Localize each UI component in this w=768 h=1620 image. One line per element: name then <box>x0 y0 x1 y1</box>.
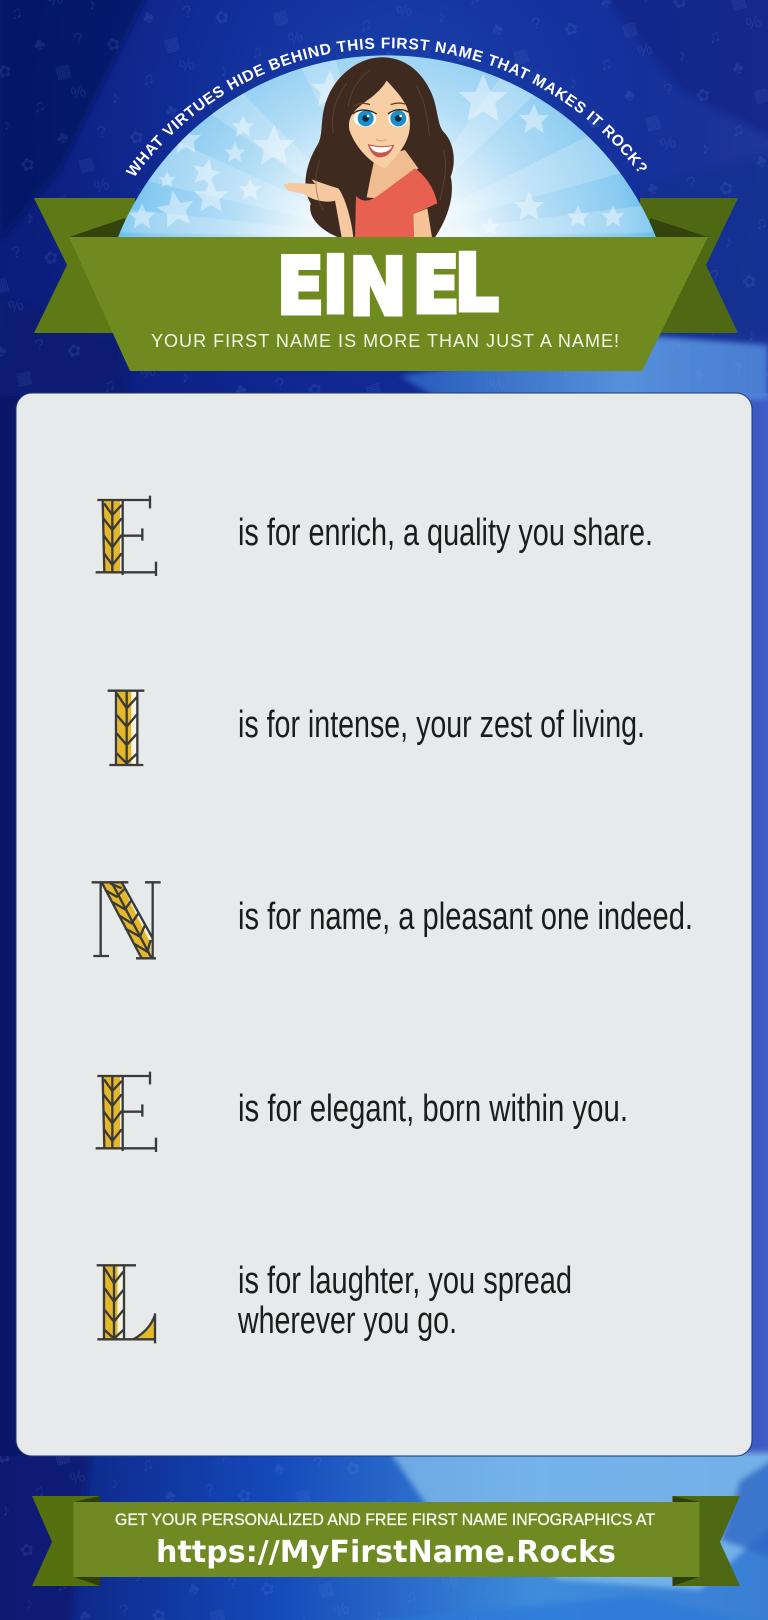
hair <box>305 57 454 237</box>
footer line: GET YOUR PERSONALIZED AND FREE FIRST NAME INFOGRAPHICS AT <box>115 1511 655 1529</box>
footer left tail <box>32 1496 100 1586</box>
footer folds <box>74 1496 699 1586</box>
text L: is for laughter, you spread <box>238 1260 572 1302</box>
main panel <box>16 393 752 1456</box>
letter N <box>92 882 161 958</box>
curved banner arch with starburst <box>118 55 656 237</box>
ribbon fold right <box>650 218 708 237</box>
neck <box>367 150 418 198</box>
letter I <box>108 691 144 765</box>
row 5: L <box>97 1260 572 1343</box>
nose <box>376 139 387 141</box>
row 3: N <box>92 882 693 958</box>
face <box>349 81 410 168</box>
ribbon fold left <box>69 218 125 237</box>
name: EINEL <box>277 239 498 333</box>
left ribbon tail <box>34 198 135 333</box>
right arm <box>413 208 432 237</box>
footer ribbon <box>32 1496 740 1586</box>
footer right tail <box>672 1496 740 1586</box>
mouth <box>368 144 394 157</box>
letter L <box>97 1265 155 1343</box>
row 1: E <box>96 496 653 576</box>
letter E <box>96 1072 156 1152</box>
shirt <box>355 168 437 237</box>
text I: is for intense, your zest of living. <box>238 704 645 746</box>
hair highlights <box>316 70 445 210</box>
letter E <box>96 496 156 576</box>
footer main ribbon <box>74 1502 700 1577</box>
footer url: https://MyFirstName.Rocks <box>156 1535 616 1570</box>
main ribbon <box>69 237 708 371</box>
eyes <box>353 103 409 127</box>
character: woman presenting <box>283 57 454 237</box>
text L: wherever you go. <box>237 1300 457 1342</box>
row 2: I <box>108 691 645 765</box>
row 4: E <box>96 1072 628 1152</box>
curved headline: WHAT VIRTUES HIDE BEHIND THIS FIRST NAME THAT MAKES IT ROCK? <box>126 38 647 176</box>
title ribbon <box>69 237 708 371</box>
right ribbon tail <box>640 198 738 333</box>
text E: is for elegant, born within you. <box>238 1088 628 1130</box>
tagline: YOUR FIRST NAME IS MORE THAN JUST A NAME! <box>151 331 619 351</box>
left arm and hand <box>283 179 353 237</box>
